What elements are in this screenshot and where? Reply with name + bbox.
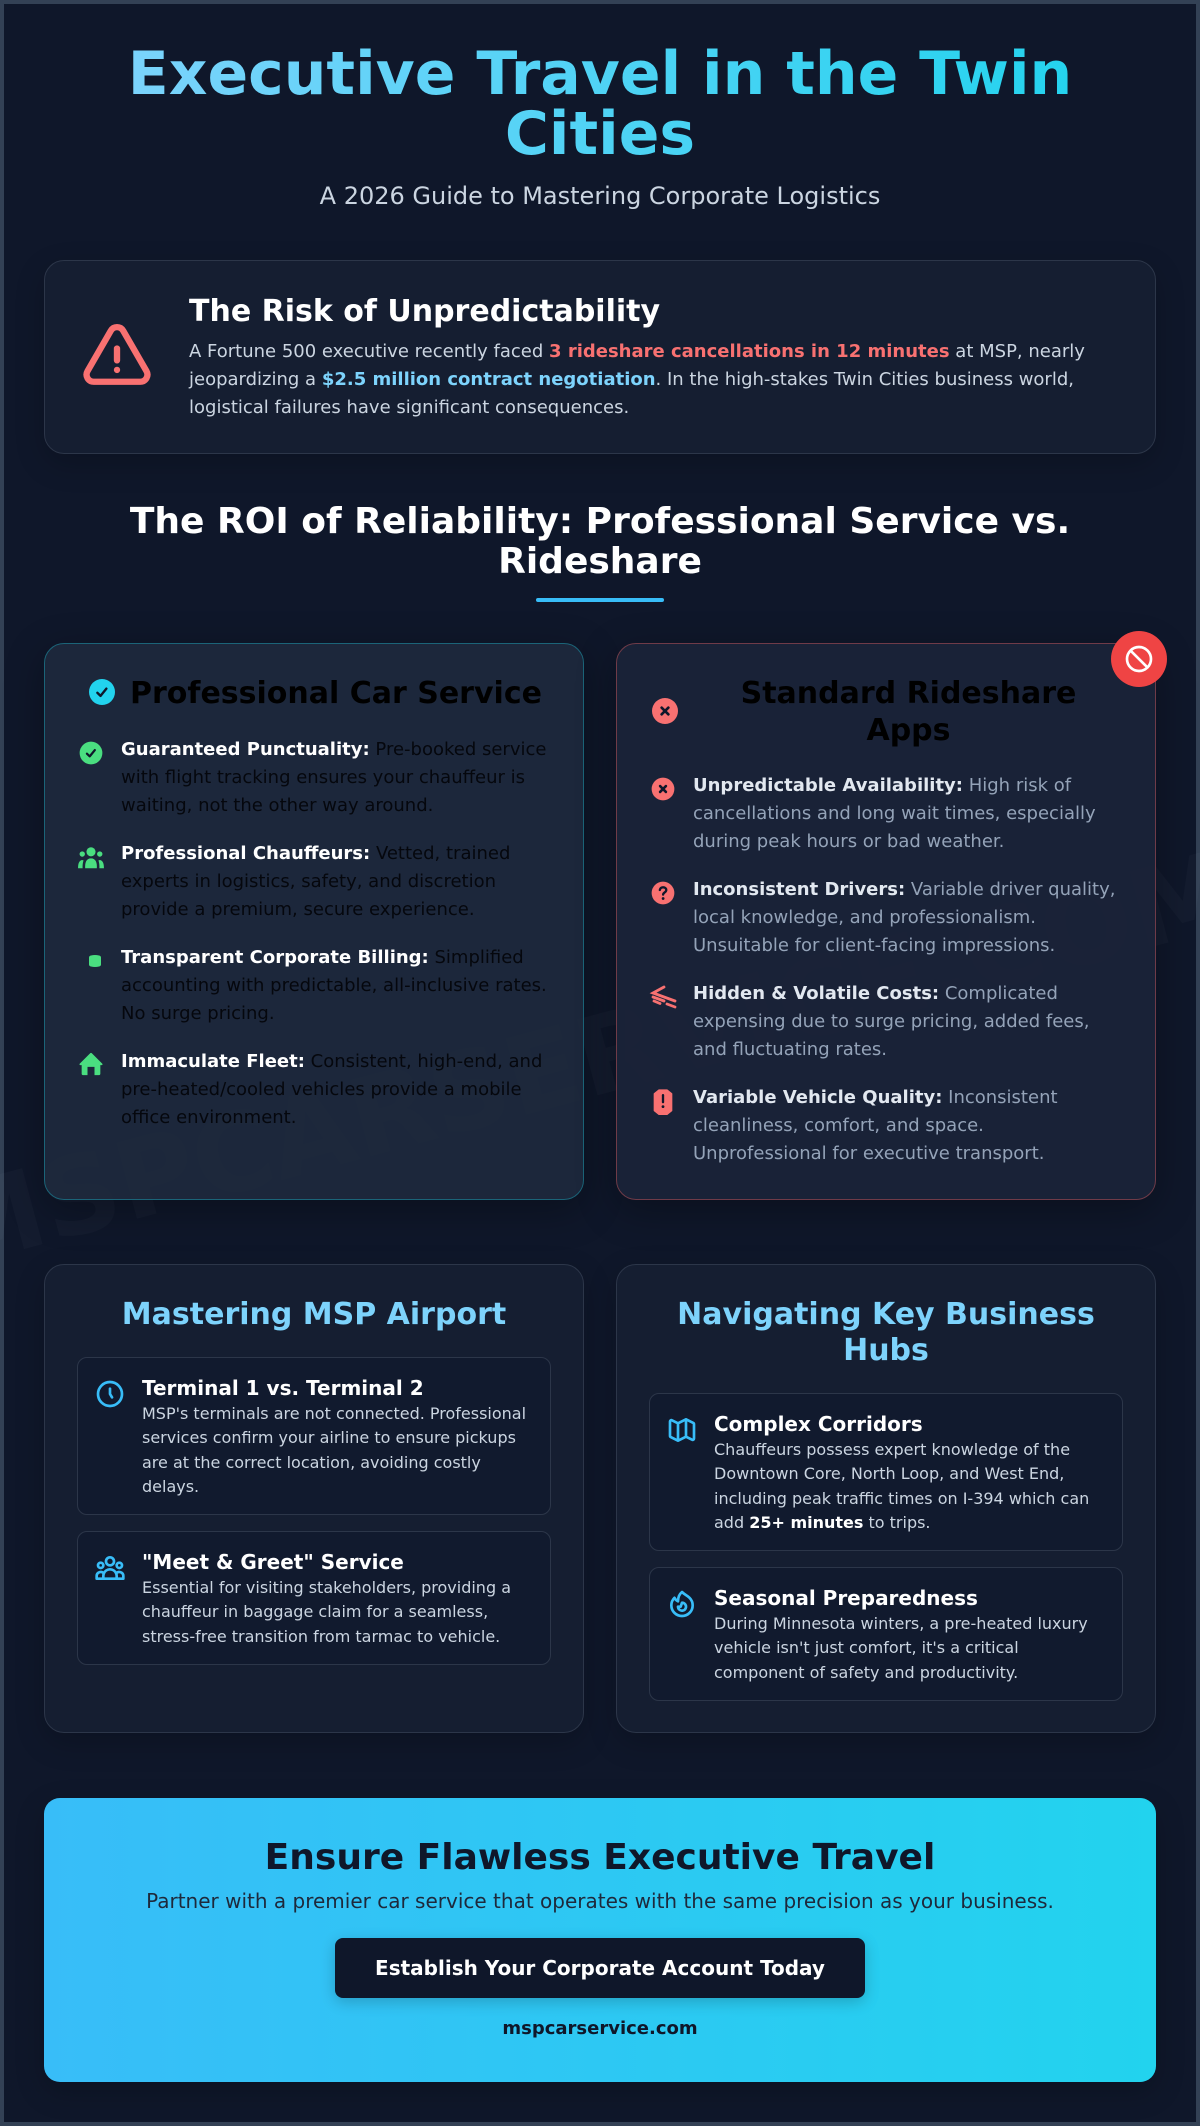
item: transparent billing: Transparent Corporate Billing: Simplified bbox=[121, 947, 524, 968]
heading: mastering MSP: Mastering MSP Airport bbox=[122, 1297, 506, 1332]
icon: red volatile lines bbox=[650, 986, 676, 1008]
risk heading: The Risk of Unpredictability bbox=[189, 294, 660, 329]
seasonal title: Seasonal Preparedness bbox=[714, 1586, 978, 1610]
panel: professional car service bbox=[44, 643, 584, 1200]
icon: header check bbox=[89, 679, 115, 705]
icon: map bbox=[668, 1418, 696, 1442]
title: Executive Travel in the Twin bbox=[128, 39, 1072, 109]
item: professional chauffeurs: Professional Chauffeurs: Vetted, trained bbox=[121, 843, 510, 864]
seasonal text: vehicle isn't just comfort, it's a critical bbox=[714, 1638, 1019, 1657]
corridors text: Downtown Core, North Loop, and West End, bbox=[714, 1464, 1064, 1483]
item: unpredictable availability bbox=[693, 775, 1096, 852]
item: hidden costs: and fluctuating rates. bbox=[693, 1039, 887, 1060]
item: variable vehicle quality bbox=[693, 1087, 1058, 1164]
risk text bbox=[188, 341, 1085, 418]
terminal text: delays. bbox=[142, 1477, 199, 1496]
subtitle: A 2026 Guide to Mastering Corporate Logistics bbox=[320, 182, 880, 210]
item: unpredictable availability: cancellations and long wait times, especially bbox=[693, 803, 1096, 824]
corridors title: Complex Corridors bbox=[714, 1412, 923, 1436]
item: unpredictable availability: during peak hours or bad weather. bbox=[693, 831, 1004, 852]
item: professional chauffeurs: provide a premium, secure experience. bbox=[121, 899, 475, 920]
icon: red question bbox=[652, 882, 674, 904]
icon: green check bbox=[80, 742, 102, 764]
heading: navigating hubs: Hubs bbox=[843, 1333, 929, 1368]
icon: green home bbox=[80, 1052, 102, 1076]
icon: flame bbox=[670, 1590, 694, 1618]
item: immaculate fleet: Immaculate Fleet: Consistent, high-end, and bbox=[121, 1051, 542, 1072]
icon: red octagon alert bbox=[654, 1089, 672, 1115]
item: hidden costs: expensing due to surge pricing, added fees, bbox=[693, 1011, 1089, 1032]
icon: red x bbox=[652, 778, 674, 800]
section heading: ROI of reliability bbox=[130, 501, 1070, 582]
item: professional chauffeurs: experts in logistics, safety, and discretion bbox=[121, 871, 496, 892]
item: inconsistent drivers: Unsuitable for client-facing impressions. bbox=[693, 935, 1055, 956]
item: variable vehicle quality: Variable Vehicle Quality: Inconsistent bbox=[693, 1087, 1058, 1108]
item: hidden costs bbox=[693, 983, 1089, 1060]
icon: group bbox=[95, 1556, 125, 1580]
CTA text: Partner with a premier car service that operates with the same precision as your business. bbox=[146, 1889, 1054, 1913]
heading: standard rideshare apps: Apps bbox=[866, 712, 951, 748]
corridors text: including peak traffic times on I-394 which can bbox=[714, 1489, 1089, 1508]
panel: navigating business hubs bbox=[616, 1264, 1156, 1733]
item: transparent billing bbox=[121, 947, 547, 1024]
terminal text: are at the correct location, avoiding costly bbox=[142, 1453, 481, 1472]
icon: header x bbox=[652, 698, 678, 724]
card: meet and greet bbox=[77, 1531, 551, 1665]
corridors text bbox=[714, 1440, 1089, 1532]
item: inconsistent drivers bbox=[693, 879, 1115, 956]
heading: standard rideshare apps bbox=[741, 676, 1076, 748]
item: professional chauffeurs bbox=[121, 843, 510, 920]
icon: warning triangle bbox=[83, 324, 151, 385]
item: transparent billing: accounting with predictable, all-inclusive rates. bbox=[121, 975, 547, 996]
card: seasonal preparedness bbox=[649, 1567, 1123, 1701]
panel: standard rideshare apps bbox=[616, 643, 1156, 1200]
icon: red ban badge bbox=[1111, 631, 1167, 687]
panel: risk of unpredictability bbox=[44, 260, 1156, 454]
section heading: ROI of reliability: The ROI of Reliability: Professional Service vs. bbox=[130, 501, 1070, 542]
risk text: logistical failures have significant consequences. bbox=[189, 397, 629, 418]
item: guaranteed punctuality: Guaranteed Punctuality: Pre-booked service bbox=[121, 739, 546, 760]
icon: green billing blob bbox=[89, 955, 101, 967]
item: unpredictable availability: Unpredictable Availability: High risk of bbox=[693, 775, 1071, 796]
card: terminal 1 vs 2 bbox=[77, 1357, 551, 1515]
item: immaculate fleet bbox=[121, 1051, 542, 1128]
heading: navigating hubs: Navigating Key Business bbox=[677, 1297, 1095, 1332]
item: variable vehicle quality: cleanliness, comfort, and space. bbox=[693, 1115, 984, 1136]
item: guaranteed punctuality bbox=[121, 739, 546, 816]
CTA button bbox=[335, 1938, 865, 1998]
heading: professional car service: Professional Car Service bbox=[130, 676, 542, 711]
meet text: stress-free transition from tarmac to vehicle. bbox=[142, 1627, 500, 1646]
card: complex corridors bbox=[649, 1393, 1123, 1551]
meet text: Essential for visiting stakeholders, providing a bbox=[142, 1578, 511, 1597]
meet title: "Meet & Greet" Service bbox=[142, 1550, 404, 1574]
terminal text: services confirm your airline to ensure pickups bbox=[142, 1428, 516, 1447]
section heading: ROI of reliability: Rideshare bbox=[498, 541, 702, 582]
item: inconsistent drivers: local knowledge, and professionalism. bbox=[693, 907, 1036, 928]
heading underline bbox=[536, 598, 664, 602]
terminal title: Terminal 1 vs. Terminal 2 bbox=[142, 1376, 424, 1400]
panel: call to action bbox=[44, 1798, 1156, 2082]
CTA heading: Ensure Flawless Executive Travel bbox=[265, 1837, 935, 1878]
heading: navigating hubs bbox=[677, 1297, 1095, 1368]
CTA website: mspcarservice.com bbox=[502, 2018, 698, 2039]
seasonal text: During Minnesota winters, a pre-heated luxury bbox=[714, 1614, 1088, 1633]
risk text: jeopardizing a $2.5 million contract negotiation. In the high-stakes Twin Cities business world, bbox=[189, 369, 1074, 390]
terminal text bbox=[142, 1404, 526, 1496]
item: variable vehicle quality: Unprofessional for executive transport. bbox=[693, 1143, 1044, 1164]
meet text: chauffeur in baggage claim for a seamless, bbox=[142, 1602, 488, 1621]
meet text bbox=[142, 1578, 511, 1646]
seasonal text bbox=[714, 1614, 1088, 1682]
title: Cities bbox=[505, 99, 695, 169]
item: guaranteed punctuality: with flight tracking ensures your chauffeur is bbox=[121, 767, 525, 788]
panel: mastering MSP airport bbox=[44, 1264, 584, 1733]
item: immaculate fleet: office environment. bbox=[121, 1107, 296, 1128]
corridors text: Chauffeurs possess expert knowledge of the bbox=[714, 1440, 1070, 1459]
heading: standard rideshare apps: Standard Rideshare bbox=[741, 676, 1076, 711]
corridors text: add 25+ minutes to trips. bbox=[714, 1513, 931, 1532]
CTA button: Establish Your Corporate Account Today bbox=[375, 1956, 825, 1980]
title bbox=[128, 39, 1072, 169]
seasonal text: component of safety and productivity. bbox=[714, 1663, 1018, 1682]
item: transparent billing: No surge pricing. bbox=[121, 1003, 275, 1024]
item: inconsistent drivers: Inconsistent Drivers: Variable driver quality, bbox=[693, 879, 1115, 900]
item: hidden costs: Hidden & Volatile Costs: Complicated bbox=[693, 983, 1058, 1004]
terminal text: MSP's terminals are not connected. Professional bbox=[142, 1404, 526, 1423]
item: guaranteed punctuality: waiting, not the other way around. bbox=[121, 795, 433, 816]
risk text: A Fortune 500 executive recently faced 3 rideshare cancellations in 12 minutes at MSP, nearly bbox=[189, 341, 1085, 362]
item: immaculate fleet: pre-heated/cooled vehicles provide a mobile bbox=[121, 1079, 522, 1100]
icon: clock bbox=[96, 1380, 124, 1408]
icon: green people bbox=[78, 847, 104, 868]
